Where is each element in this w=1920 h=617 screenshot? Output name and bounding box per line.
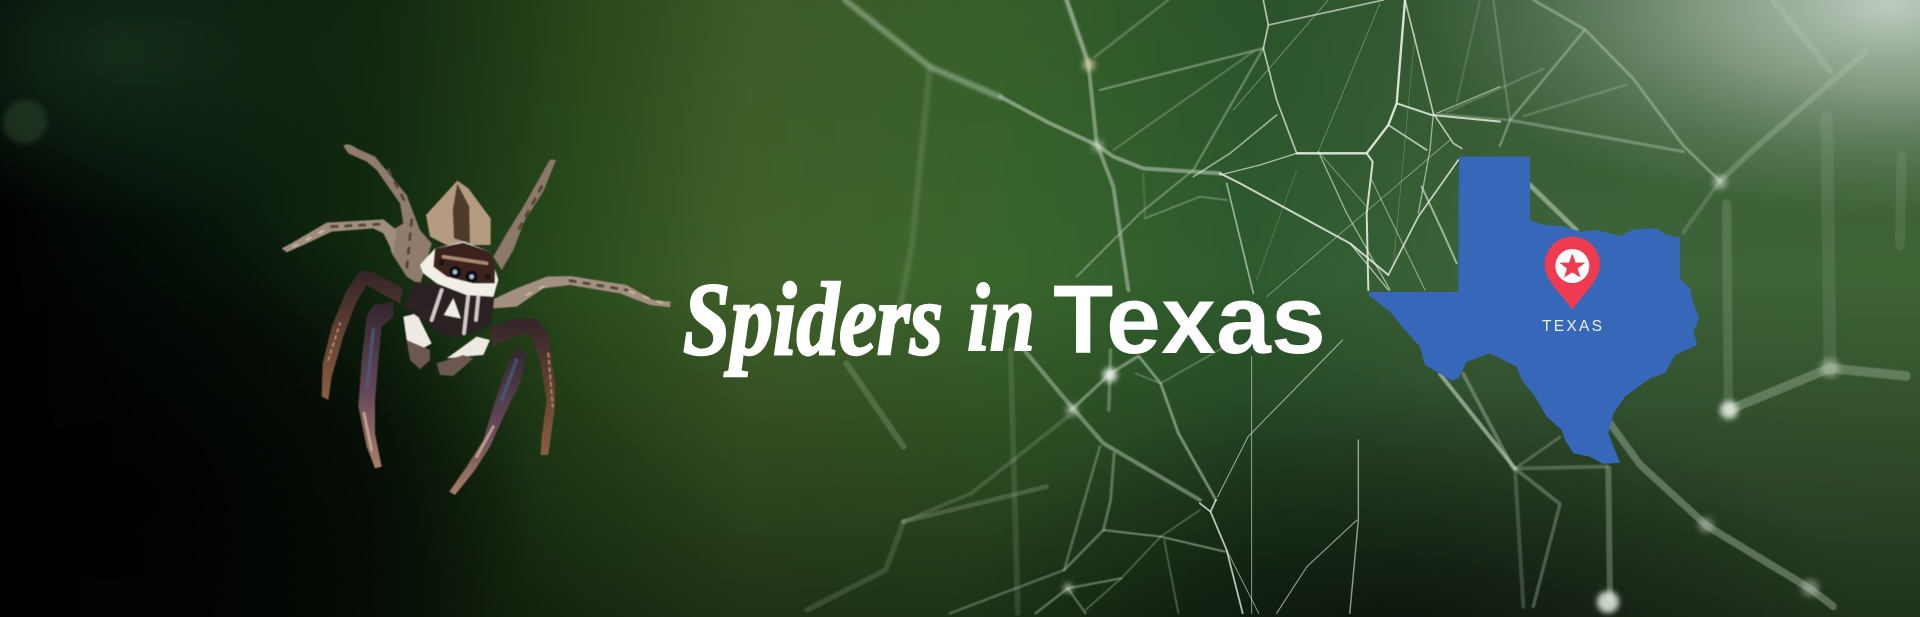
title bold: Texas: Texas — [1053, 265, 1326, 374]
state silhouette — [1368, 157, 1699, 464]
title script: in: in — [967, 264, 1035, 371]
soft lower strands — [807, 347, 1225, 613]
Texas map — [1368, 157, 1699, 464]
title script: Spiders: Spiders — [683, 262, 943, 377]
abdomen — [426, 181, 491, 245]
sharp lower strands — [1200, 340, 1358, 613]
dark front legs — [322, 271, 555, 495]
palps — [403, 313, 490, 376]
map label: TEXAS — [1542, 318, 1602, 335]
spider web: lower centre strands — [807, 340, 1358, 613]
pale rear legs — [282, 144, 671, 308]
sharp upper strands — [1193, 0, 1500, 297]
spider web: upper centre strands — [1000, 0, 1500, 297]
head with eyes — [420, 242, 498, 297]
soft upper strands — [1000, 0, 1263, 290]
title — [683, 262, 1326, 377]
spider web: right blurred strands — [1440, 0, 1907, 606]
thorax — [403, 282, 495, 338]
spider photo — [282, 144, 671, 495]
spider web: far left out-of-focus strands — [845, 0, 1088, 306]
location pin with star — [1545, 237, 1600, 310]
